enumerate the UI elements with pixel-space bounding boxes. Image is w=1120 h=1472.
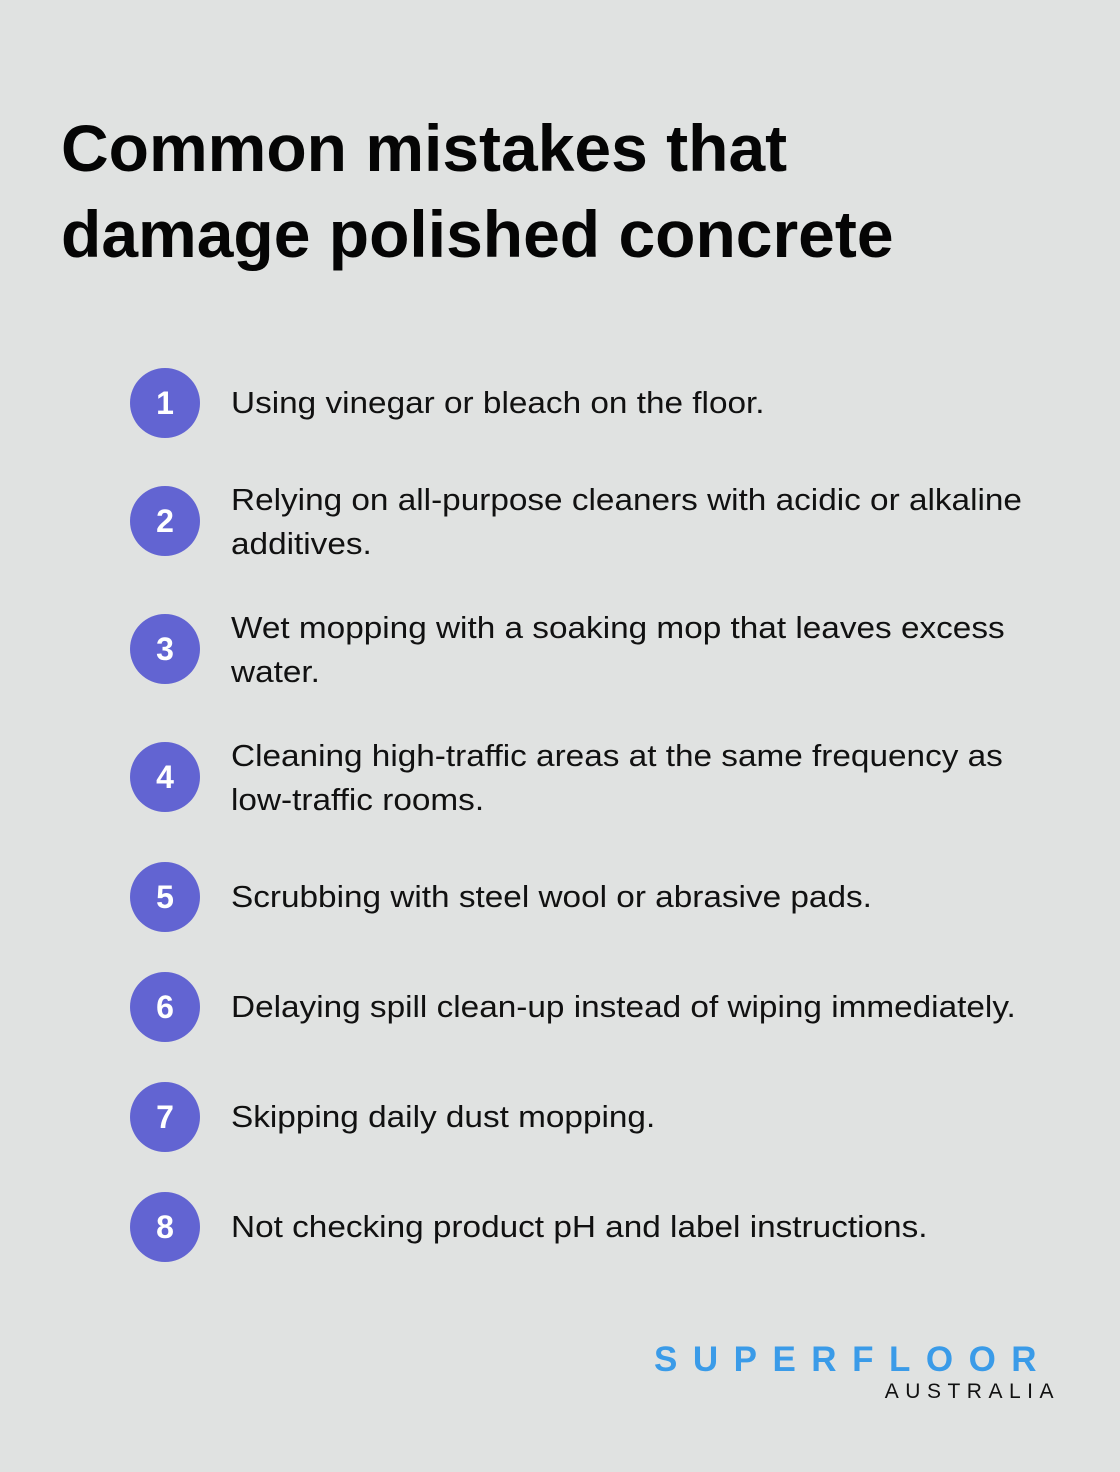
item 8: [130, 1192, 928, 1262]
item 5: Scrubbing with steel wool or abrasive pads.: [231, 879, 872, 914]
item 1: [130, 368, 765, 438]
item 7: [130, 1082, 655, 1152]
item 7: Skipping daily dust mopping.: [231, 1099, 655, 1134]
title: damage polished concrete: [61, 197, 894, 271]
item 2: [130, 482, 1022, 561]
item 6: Delaying spill clean-up instead of wiping immediately.: [231, 989, 1016, 1024]
title: [61, 111, 894, 271]
item 4: 4: [156, 759, 174, 795]
item 5: 5: [156, 879, 174, 915]
item 1: 1: [156, 385, 174, 421]
item 8: Not checking product pH and label instructions.: [231, 1209, 928, 1244]
item 4: [130, 738, 1003, 817]
title: Common mistakes that: [61, 111, 787, 185]
item 7: 7: [156, 1099, 174, 1135]
item 6: 6: [156, 989, 174, 1025]
item 3: [130, 610, 1005, 689]
item 1: Using vinegar or bleach on the floor.: [231, 385, 765, 420]
item 6: [130, 972, 1016, 1042]
logo: AUSTRALIA: [885, 1380, 1060, 1403]
item 4: low-traffic rooms.: [231, 782, 484, 817]
logo: [654, 1340, 1060, 1403]
item 2: additives.: [231, 526, 372, 561]
item 3: Wet mopping with a soaking mop that leaves excess: [231, 610, 1005, 645]
item 5: [130, 862, 872, 932]
item 3: 3: [156, 631, 174, 667]
item 2: 2: [156, 503, 174, 539]
item 8: 8: [156, 1209, 174, 1245]
item 4: Cleaning high-traffic areas at the same frequency as: [231, 738, 1003, 773]
item 2: Relying on all-purpose cleaners with acidic or alkaline: [231, 482, 1022, 517]
item 3: water.: [231, 654, 320, 689]
logo: SUPERFLOOR: [654, 1340, 1052, 1379]
